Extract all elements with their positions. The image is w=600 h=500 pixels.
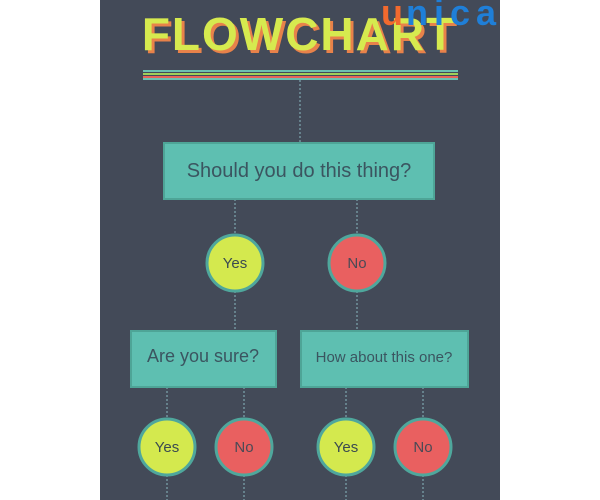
circle: yes 3: Yes [334, 439, 358, 456]
panel: background [100, 0, 500, 500]
title: FLOWCHART [142, 8, 456, 60]
box: are you sure: Are you sure? [147, 346, 259, 366]
circle: yes: Yes [223, 255, 247, 272]
circle: yes 2 [139, 419, 195, 475]
box: main question: Should you do this thing? [187, 160, 411, 182]
box: are you sure [131, 331, 276, 387]
connectors [167, 80, 423, 500]
circle: no 3: No [413, 439, 433, 456]
circle: yes [207, 235, 263, 291]
circle: no: No [347, 255, 367, 272]
circle: yes 3 [318, 419, 374, 475]
circle: no 3 [395, 419, 451, 475]
title: FLOWCHART [145, 11, 459, 63]
circle: no 2: No [234, 439, 254, 456]
box: how about this one [301, 331, 468, 387]
circle: no [329, 235, 385, 291]
box: how about this one: How about this one? [316, 349, 452, 366]
circle: yes 2: Yes [155, 439, 179, 456]
circle: no 2 [216, 419, 272, 475]
box: main question [164, 143, 434, 199]
